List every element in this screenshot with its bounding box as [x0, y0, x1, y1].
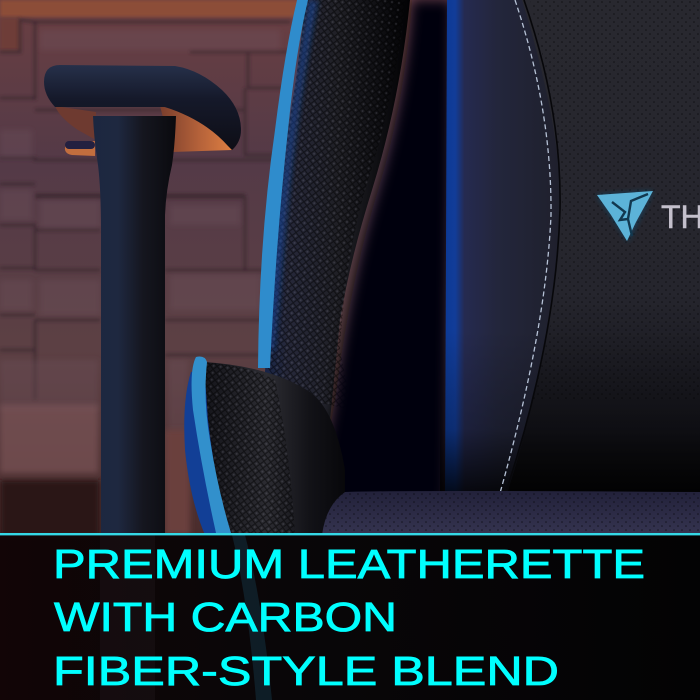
- armrest post: [93, 116, 176, 535]
- strip fade to shadow: [440, 330, 700, 495]
- logo inner cut: [612, 194, 648, 236]
- faint piping visible through band: [232, 535, 272, 700]
- bolster fill: [265, 0, 410, 420]
- armrest-side seat bolster: [184, 357, 345, 535]
- caption line 3: FIBER-STYLE BLEND: [53, 648, 559, 694]
- white dashed stitching: [500, 0, 551, 493]
- logo glow: [597, 191, 653, 241]
- blue inner glow along piping: [268, 0, 318, 350]
- caption line 2: WITH CARBON: [54, 594, 397, 640]
- logo triangle icon: [597, 191, 653, 241]
- seat cushion: [322, 491, 700, 535]
- faint post visible through band: [100, 535, 155, 700]
- outer blue side: [184, 370, 240, 535]
- centre backrest panel: [440, 0, 700, 535]
- seat surface: [322, 491, 700, 535]
- backrest side bolster: [258, 0, 410, 420]
- armrest: [44, 65, 241, 535]
- bolster fill: [204, 362, 345, 535]
- bottom text band: [0, 533, 700, 700]
- carbon fiber texture: [266, 0, 405, 410]
- panel right: perforated leatherette: [490, 0, 700, 535]
- dark channel between bolster and centre panel: [310, 0, 452, 535]
- band background: [0, 535, 700, 700]
- armrest pad: [44, 65, 241, 150]
- seat perforation: [322, 491, 700, 535]
- caption line 1: PREMIUM LEATHERETTE: [53, 541, 645, 587]
- blue piping: [258, 0, 308, 368]
- logo: [597, 191, 700, 241]
- inner strip with blue edge: [445, 0, 560, 500]
- cyan divider line: [0, 533, 700, 535]
- armrest underside lit orange: [55, 106, 96, 140]
- carbon fiber texture: [204, 362, 295, 535]
- background: brick wall: [0, 0, 700, 537]
- perforation texture: [530, 0, 700, 400]
- light blue piping: [192, 357, 231, 533]
- height adjust button: [65, 141, 95, 156]
- seam line: [505, 0, 560, 495]
